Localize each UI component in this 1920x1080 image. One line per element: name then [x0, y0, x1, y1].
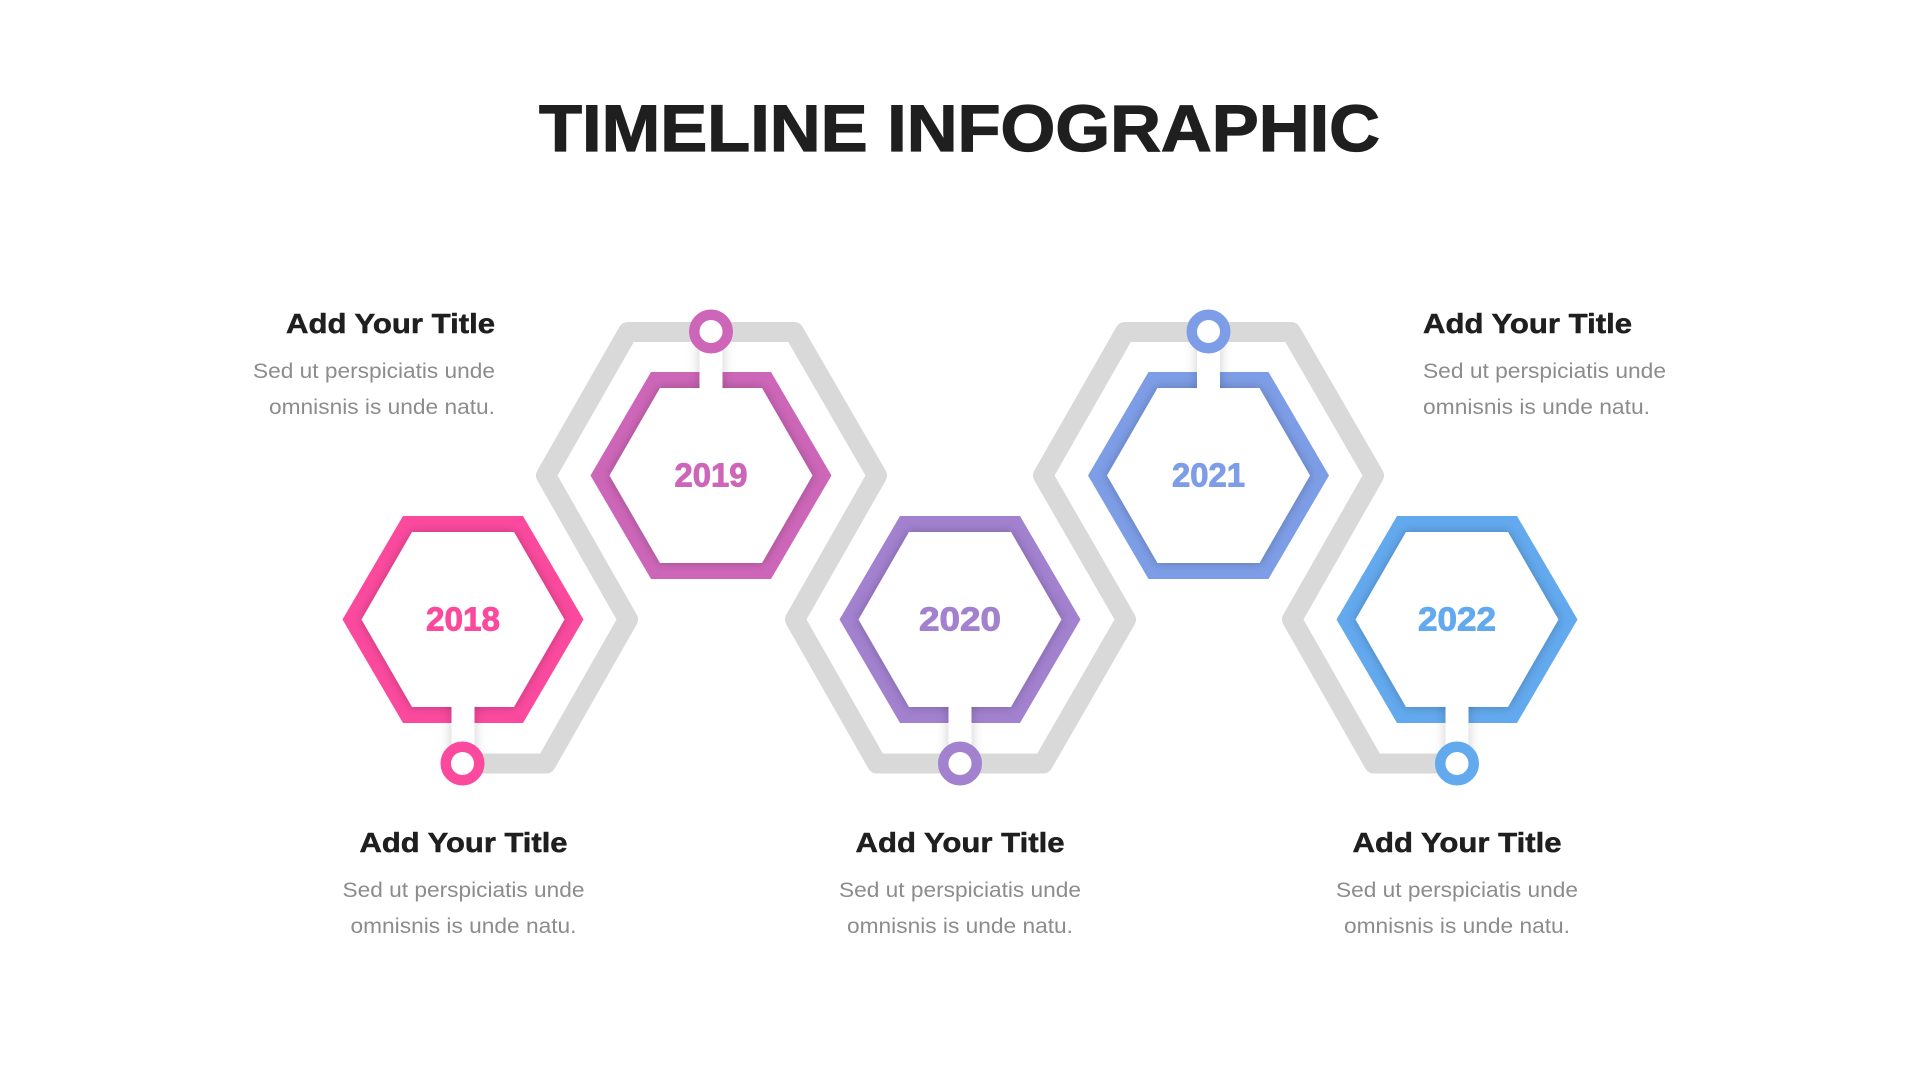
text block 2021 [1423, 308, 1666, 419]
text block 2018: omnisnis is unde natu. [350, 915, 576, 938]
year 2021: 2021 [1172, 456, 1245, 494]
text block 2021: Sed ut perspiciatis unde [1423, 360, 1666, 383]
text block 2018: Add Your Title [360, 827, 568, 858]
text block 2022 [1336, 827, 1578, 938]
hexagon frame 2021 [1088, 372, 1329, 579]
year 2022: 2022 [1418, 600, 1496, 638]
step 2019 [590, 306, 832, 579]
hexagon frame 2019 [590, 372, 832, 579]
grey connecting line [463, 332, 1457, 764]
text block 2022: omnisnis is unde natu. [1344, 915, 1570, 938]
ring marker 2020 [943, 747, 977, 780]
text block 2021: omnisnis is unde natu. [1423, 396, 1650, 419]
year 2019: 2019 [674, 456, 748, 494]
title: TIMELINE INFOGRAPHIC [539, 91, 1380, 165]
text block 2020: Add Your Title [856, 827, 1064, 858]
hexagon frame 2020 [840, 516, 1080, 723]
text block 2019 [253, 308, 495, 419]
step 2018 [342, 516, 584, 790]
text block 2018 [342, 827, 584, 938]
ring marker 2019 [694, 315, 728, 348]
text block 2021: Add Your Title [1423, 308, 1632, 339]
step 2022 [1336, 516, 1578, 790]
ring marker 2018 [446, 747, 479, 780]
text block 2020: omnisnis is unde natu. [847, 915, 1073, 938]
hexagon frame 2022 [1336, 516, 1578, 723]
text block 2018: Sed ut perspiciatis unde [342, 879, 584, 902]
text block 2019: Add Your Title [286, 308, 495, 339]
text block 2022: Add Your Title [1352, 827, 1562, 858]
text block 2019: omnisnis is unde natu. [269, 396, 495, 419]
step 2020 [840, 516, 1080, 790]
text block 2020: Sed ut perspiciatis unde [839, 879, 1081, 902]
year 2018: 2018 [426, 600, 500, 638]
year 2020: 2020 [919, 600, 1001, 638]
text block 2022: Sed ut perspiciatis unde [1336, 879, 1578, 902]
text block 2020 [839, 827, 1081, 938]
timeline infographic [254, 104, 1665, 933]
ring marker 2021 [1192, 315, 1225, 348]
text block 2019: Sed ut perspiciatis unde [253, 360, 495, 383]
ring marker 2022 [1440, 747, 1474, 780]
step 2021 [1088, 306, 1329, 579]
hexagon frame 2018 [342, 516, 584, 723]
